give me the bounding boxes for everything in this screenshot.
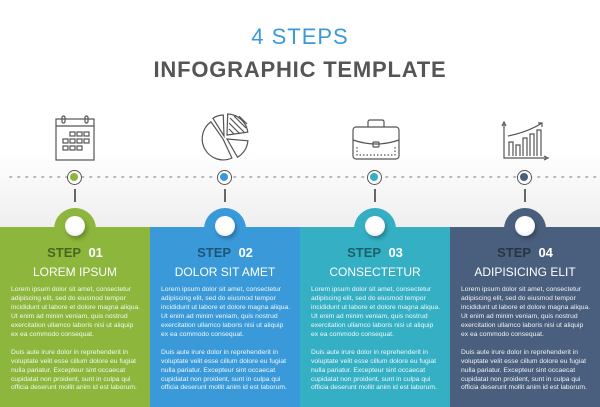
panel: step 2: incididunt ut labore et dolore magna aliqua. xyxy=(161,304,290,311)
panel: step 2: exercitation ullamco laboris nisi ut aliquip xyxy=(161,322,283,329)
subtitle: INFOGRAPHIC TEMPLATE xyxy=(153,57,447,82)
panel: step 4: exercitation ullamco laboris nisi ut aliquip xyxy=(461,322,583,329)
panel: step 4: voluptate velit esse cillum dolore eu fugiat xyxy=(461,358,586,365)
panel: step 1: ex ea commodo consequat. xyxy=(11,331,94,338)
panel: step 3: voluptate velit esse cillum dolore eu fugiat xyxy=(311,358,436,365)
panel: step 2: officia deserunt mollit anim id est laborum. xyxy=(161,384,287,391)
panel: step 2: cupidatat non proident, sunt in culpa qui xyxy=(161,376,280,383)
icon: pie chart xyxy=(202,113,248,160)
node: step 1 xyxy=(67,170,82,185)
panel: step 2: adipiscing elit, sed do eiusmod tempor xyxy=(161,295,276,302)
node: step 2 xyxy=(217,170,232,185)
panel: step 3: Duis aute irure dolor in reprehenderit in xyxy=(311,349,428,356)
panel: step 3: incididunt ut labore et dolore magna aliqua. xyxy=(311,304,440,311)
panel: step 4 xyxy=(450,227,600,407)
panel: step 4: ex ea commodo consequat. xyxy=(461,331,544,338)
panel: step 1 xyxy=(0,227,150,407)
panel: step 2: STEP 02 xyxy=(197,245,253,260)
panel: step 2: voluptate velit esse cillum dolore eu fugiat xyxy=(161,358,286,365)
panel: step 4: incididunt ut labore et dolore magna aliqua. xyxy=(461,304,590,311)
panel: step 3: officia deserunt mollit anim id est laborum. xyxy=(311,384,437,391)
panel: step 1: LOREM IPSUM xyxy=(33,265,117,279)
node: step 3 xyxy=(367,170,382,185)
panel: step 3: exercitation ullamco laboris nisi ut aliquip xyxy=(311,322,433,329)
panel: step 4: Duis aute irure dolor in reprehenderit in xyxy=(461,349,578,356)
panel: step 4: STEP 04 xyxy=(497,245,553,260)
panel: step 2: Ut enim ad minim veniam, quis nostrud xyxy=(161,313,278,320)
panel: step 2: Lorem ipsum dolor sit amet, consectetur xyxy=(161,286,281,293)
panel: step 4: adipiscing elit, sed do eiusmod tempor xyxy=(461,295,576,302)
panel: step 2: ex ea commodo consequat. xyxy=(161,331,244,338)
panel: step 1: Ut enim ad minim veniam, quis nostrud xyxy=(11,313,128,320)
panel: step 1: Duis aute irure dolor in reprehenderit in xyxy=(11,349,128,356)
panel: step 4: Lorem ipsum dolor sit amet, consectetur xyxy=(461,286,581,293)
panel: step 3: ex ea commodo consequat. xyxy=(311,331,394,338)
panel: step 4: cupidatat non proident, sunt in culpa qui xyxy=(461,376,580,383)
icon: growth chart xyxy=(502,120,550,160)
panel: step 4: Ut enim ad minim veniam, quis nostrud xyxy=(461,313,578,320)
panel: step 2 xyxy=(150,227,300,407)
panel: step 3: cupidatat non proident, sunt in culpa qui xyxy=(311,376,430,383)
connectors xyxy=(74,189,76,202)
panel: step 1: voluptate velit esse cillum dolore eu fugiat xyxy=(11,358,136,365)
panel: step 4: ADIPISICING ELIT xyxy=(474,265,576,279)
panel: step 1: incididunt ut labore et dolore magna aliqua. xyxy=(11,304,140,311)
panel: step 3: nulla pariatur. Excepteur sint occaecat xyxy=(311,367,425,374)
panel: step 3 xyxy=(300,227,450,407)
panel: step 2: nulla pariatur. Excepteur sint occaecat xyxy=(161,367,275,374)
panel: step 1: nulla pariatur. Excepteur sint occaecat xyxy=(11,367,125,374)
panel: step 1: exercitation ullamco laboris nisi ut aliquip xyxy=(11,322,133,329)
panel: step 1: STEP 01 xyxy=(47,245,103,260)
panel: step 3: Lorem ipsum dolor sit amet, consectetur xyxy=(311,286,431,293)
panel: step 1: Lorem ipsum dolor sit amet, consectetur xyxy=(11,286,131,293)
panel: step 2: DOLOR SIT AMET xyxy=(175,265,275,279)
node: step 4 xyxy=(517,170,532,185)
panel: step 2: Duis aute irure dolor in reprehenderit in xyxy=(161,349,278,356)
panel: step 3: STEP 03 xyxy=(347,245,403,260)
panel: step 4: nulla pariatur. Excepteur sint occaecat xyxy=(461,367,575,374)
panel: step 1: officia deserunt mollit anim id est laborum. xyxy=(11,384,137,391)
panel: step 3: Ut enim ad minim veniam, quis nostrud xyxy=(311,313,428,320)
icon: calendar xyxy=(55,115,95,161)
icon: briefcase xyxy=(352,119,400,160)
panel: step 3: CONSECTETUR xyxy=(329,265,421,279)
dotted timeline xyxy=(9,176,596,178)
panel: step 1: adipiscing elit, sed do eiusmod tempor xyxy=(11,295,126,302)
title: 4 STEPS xyxy=(251,24,349,49)
panel: step 4: officia deserunt mollit anim id est laborum. xyxy=(461,384,587,391)
panel: step 3: adipiscing elit, sed do eiusmod tempor xyxy=(311,295,426,302)
panel: step 1: cupidatat non proident, sunt in culpa qui xyxy=(11,376,130,383)
